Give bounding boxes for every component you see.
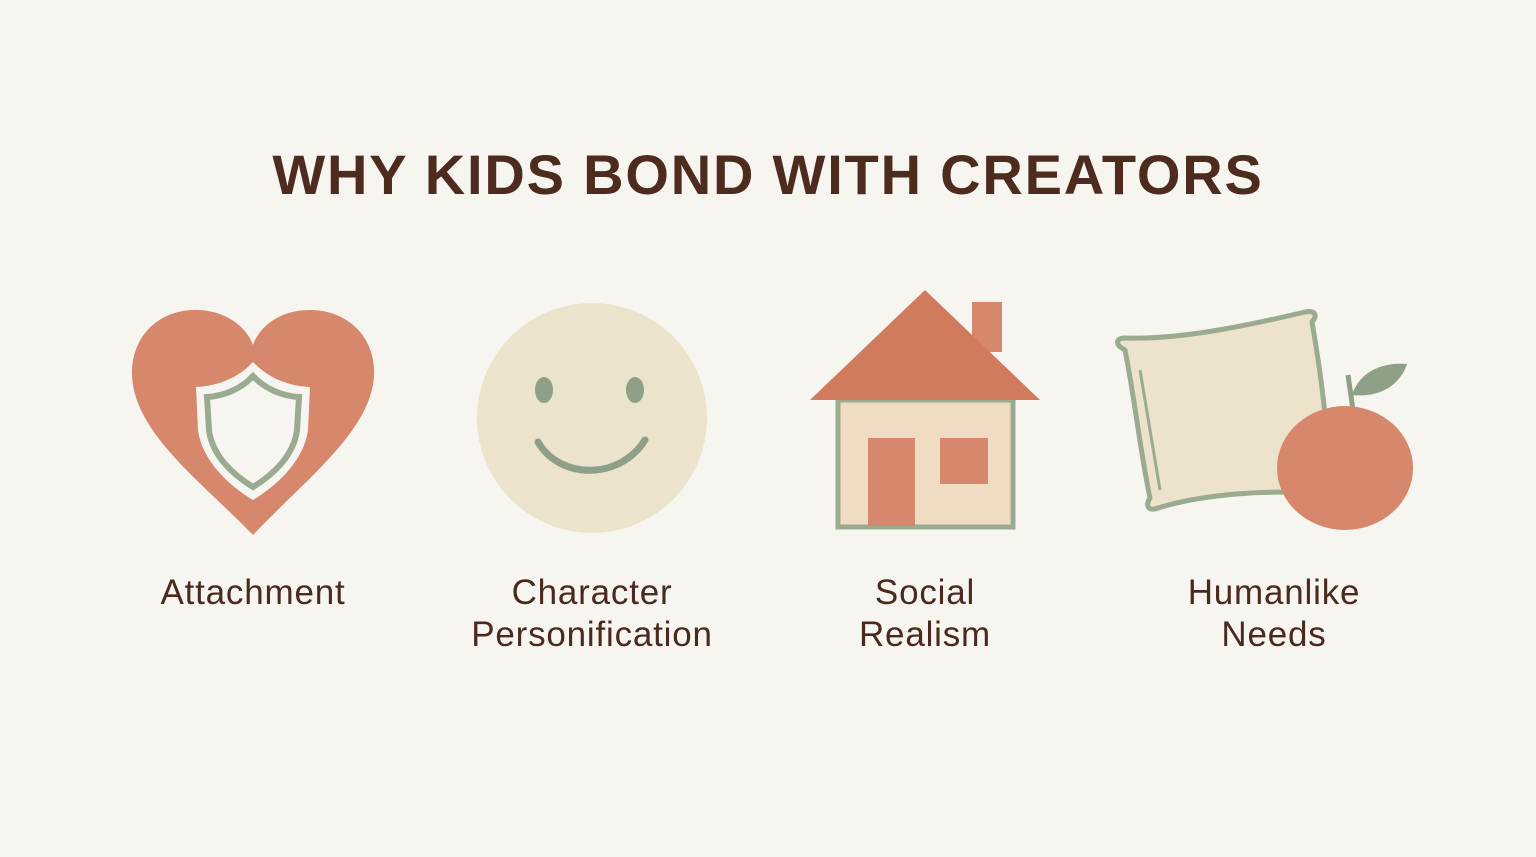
icon: heart with shield <box>132 310 374 535</box>
label: character personification: Character <box>512 573 672 612</box>
label: humanlike needs: Needs <box>1221 615 1327 654</box>
label: character personification: Personification <box>471 615 713 654</box>
label: humanlike needs <box>1188 573 1360 654</box>
icon: smiley face <box>477 303 707 533</box>
label: attachment: Attachment <box>160 573 346 612</box>
label: social realism: Social <box>875 573 975 612</box>
icon: house <box>810 290 1040 527</box>
icon: pillow and apple <box>1118 312 1413 530</box>
title: WHY KIDS BOND WITH CREATORS <box>272 143 1264 206</box>
label: social realism <box>859 573 991 654</box>
label: character personification <box>471 573 713 654</box>
label: social realism: Realism <box>859 615 991 654</box>
label: humanlike needs: Humanlike <box>1188 573 1360 612</box>
